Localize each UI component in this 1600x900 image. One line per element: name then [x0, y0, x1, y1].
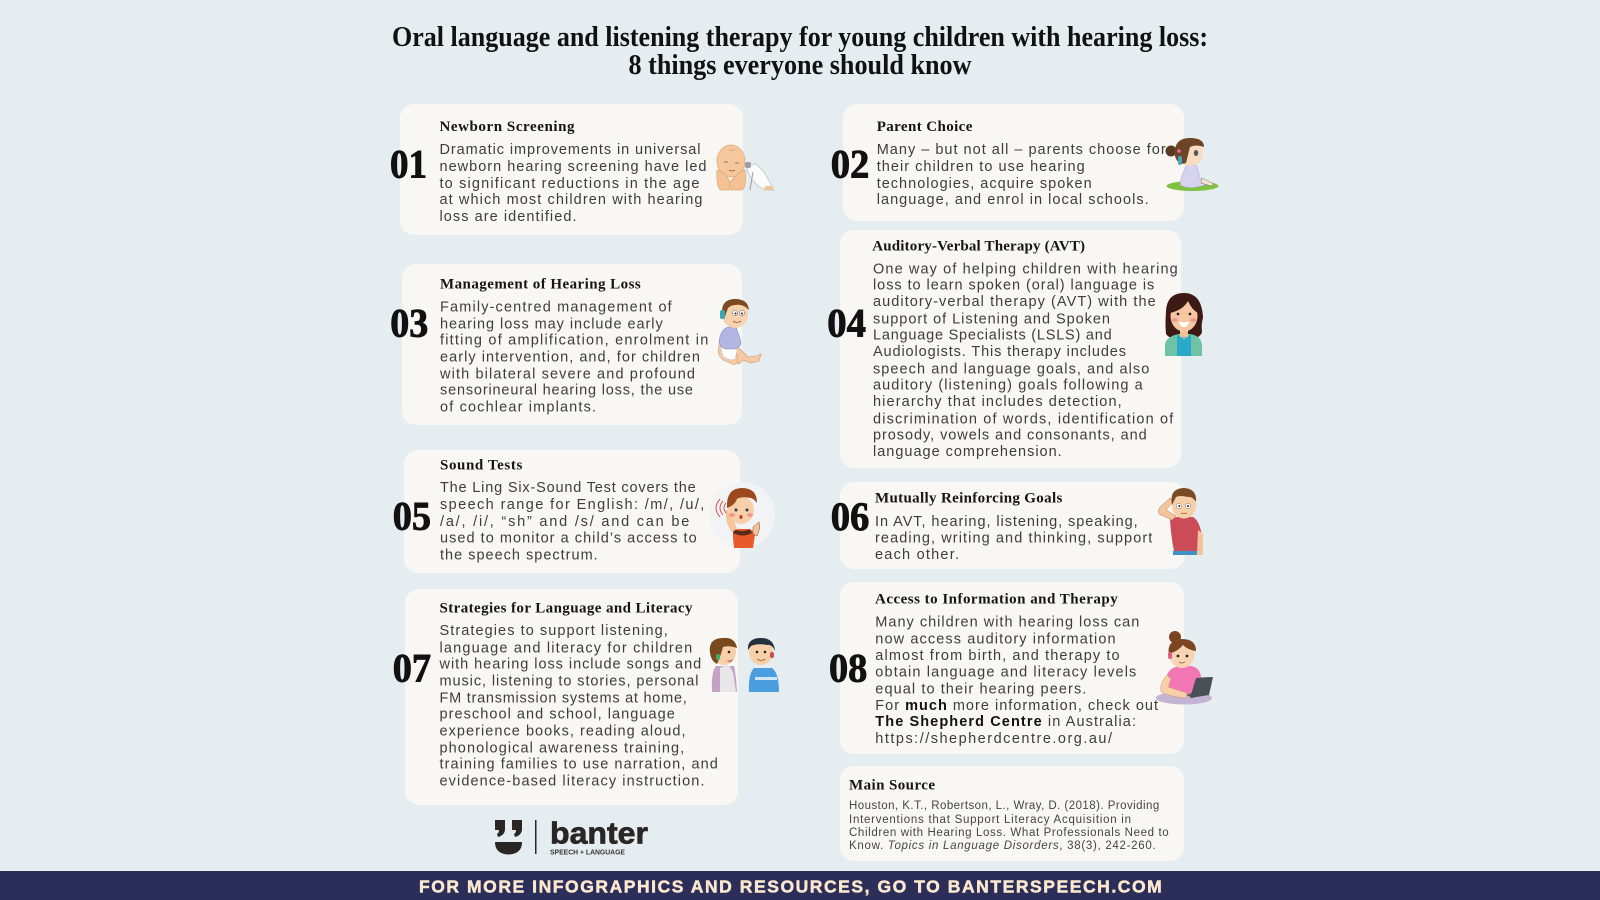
body text: Many children with hearing loss can [875, 614, 1139, 630]
heading: Access to Information and Therapy [875, 591, 1118, 607]
body text [438, 623, 718, 789]
body text: One way of helping children with hearing [873, 261, 1178, 277]
body text: language comprehension. [873, 444, 1062, 460]
citation text: Children with Hearing Loss. What Professionals Need to [849, 827, 1169, 839]
icon: baby having hearing screened [717, 145, 774, 190]
citation text: Know. Topics in Language Disorders, 38(3), 242-260. [849, 840, 1156, 852]
body text: at which most children with hearing [440, 192, 702, 208]
body text: phonological awareness training, [440, 740, 684, 756]
heading: Main Source [849, 777, 935, 793]
heading: Strategies for Language and Literacy [440, 601, 693, 617]
left boy [710, 638, 737, 692]
body text: the speech spectrum. [440, 547, 598, 563]
body text [439, 299, 708, 415]
citation text: Interventions that Support Literacy Acquisition in [849, 814, 1131, 826]
panel: main source [840, 766, 1184, 861]
body text: used to monitor a child’s access to [440, 530, 697, 546]
body text: with bilateral severe and profound [439, 366, 695, 382]
body text: prosody, vowels and consonants, and [873, 427, 1147, 443]
body text: experience books, reading aloud, [440, 723, 686, 739]
body text: early intervention, and, for children [440, 349, 700, 365]
number 08: 08 [829, 646, 867, 691]
icon: toddler with cochlear implant [718, 299, 761, 365]
body text: music, listening to stories, personal [440, 673, 698, 689]
panel: 01 newborn screening [390, 104, 743, 235]
body text: Dramatic improvements in universal [440, 142, 700, 158]
body text: with hearing loss include songs and [438, 656, 701, 672]
logo: banter speech + language: banter [550, 815, 648, 850]
icon: two boys talking [710, 638, 779, 692]
panel: 06 mutually reinforcing goals [831, 482, 1185, 569]
right boy [748, 638, 779, 692]
title: 8 things everyone should know [628, 50, 972, 81]
panel: 02 parent choice [831, 104, 1184, 221]
title [392, 22, 1208, 81]
icon: boy listening with hand at ear [709, 482, 775, 548]
panel: 05 sound tests [393, 450, 740, 573]
heading: Sound Tests [440, 457, 522, 473]
body text: loss are identified. [440, 209, 576, 225]
body text: their children to use hearing [877, 159, 1085, 175]
body text: technologies, acquire spoken [877, 176, 1092, 192]
body text: In AVT, hearing, listening, speaking, [875, 514, 1138, 530]
body text: each other. [875, 547, 959, 563]
body text [875, 514, 1152, 563]
body text: fitting of amplification, enrolment in [440, 332, 708, 348]
body text: reading, writing and thinking, support [875, 530, 1152, 546]
heading: Newborn Screening [440, 119, 575, 135]
body text: auditory (listening) goals following a [873, 377, 1144, 393]
logo: banter speech + language [495, 815, 648, 856]
body text: The Ling Six-Sound Test covers the [440, 480, 696, 496]
body text [873, 261, 1178, 460]
body text: https://shepherdcentre.org.au/ [875, 731, 1113, 747]
body text: language and literacy for children [440, 640, 692, 656]
body text [875, 614, 1158, 747]
footer banner: FOR MORE INFOGRAPHICS AND RESOURCES, GO TO BANTERSPEECH.COM [419, 877, 1162, 897]
body text: obtain language and literacy levels [875, 664, 1136, 680]
body text: equal to their hearing peers. [875, 681, 1086, 697]
number 03: 03 [390, 301, 428, 346]
heading: Parent Choice [877, 119, 973, 135]
icon: girl using a laptop [1156, 631, 1213, 704]
icon: boy scratching his head [1158, 488, 1203, 555]
body text: loss to learn spoken (oral) language is [873, 277, 1154, 293]
heading: Management of Hearing Loss [440, 277, 641, 293]
number 01: 01 [390, 141, 427, 186]
body text: sensorineural hearing loss, the use [440, 382, 693, 398]
logo: banter speech + language: SPEECH + LANGUAGE [550, 847, 625, 856]
body text: speech range for English: /m/, /u/, [440, 497, 704, 513]
body text: discrimination of words, identification of [873, 411, 1174, 427]
heading: Mutually Reinforcing Goals [875, 491, 1062, 507]
body text: hierarchy that includes detection, [873, 394, 1122, 410]
footer banner [0, 871, 1600, 900]
title: Oral language and listening therapy for young children with hearing loss: [392, 22, 1208, 53]
panel: 07 strategies for language and literacy [393, 589, 738, 805]
body text: Strategies to support listening, [440, 623, 668, 639]
body text: Audiologists. This therapy includes [873, 344, 1126, 360]
body text: The Shepherd Centre in Australia: [875, 714, 1136, 730]
number 02: 02 [831, 141, 869, 186]
body text: preschool and school, language [440, 706, 675, 722]
body text [877, 142, 1166, 208]
body text: to significant reductions in the age [440, 176, 700, 192]
body text: Language Specialists (LSLS) and [873, 327, 1112, 343]
body text: hearing loss may include early [440, 316, 663, 332]
icon: smiling woman therapist [1165, 293, 1203, 356]
body text: For much more information, check out [875, 698, 1158, 714]
panel: 03 management of hearing loss [390, 264, 742, 425]
number 05: 05 [393, 493, 431, 538]
citation text: Houston, K.T., Robertson, L., Wray, D. (2018). Providing [849, 800, 1159, 812]
body text: auditory-verbal therapy (AVT) with the [873, 294, 1156, 310]
body text: support of Listening and Spoken [873, 311, 1110, 327]
number 07: 07 [393, 646, 431, 691]
body text: training families to use narration, and [440, 756, 718, 772]
body text: evidence-based literacy instruction. [440, 773, 704, 789]
panel: 08 access to information and therapy [829, 582, 1184, 754]
number 04: 04 [827, 301, 866, 346]
body text: almost from birth, and therapy to [875, 648, 1120, 664]
body text [440, 480, 704, 563]
body text: now access auditory information [875, 631, 1116, 647]
body text: of cochlear implants. [440, 399, 596, 415]
body text: newborn hearing screening have led [440, 159, 706, 175]
body text: FM transmission systems at home, [440, 690, 687, 706]
icon: girl sitting on grass [1166, 138, 1218, 191]
body text: language, and enrol in local schools. [877, 192, 1149, 208]
body text: speech and language goals, and also [873, 361, 1149, 377]
body text [440, 142, 706, 225]
body text: Family-centred management of [440, 299, 673, 315]
citation text [849, 800, 1169, 852]
number 06: 06 [831, 494, 869, 539]
panel: 04 auditory-verbal therapy [827, 230, 1181, 468]
body text: /a/, /i/, “sh” and /s/ and can be [440, 514, 689, 530]
heading: Auditory-Verbal Therapy (AVT) [872, 239, 1085, 255]
body text: Many – but not all – parents choose for [877, 142, 1166, 158]
